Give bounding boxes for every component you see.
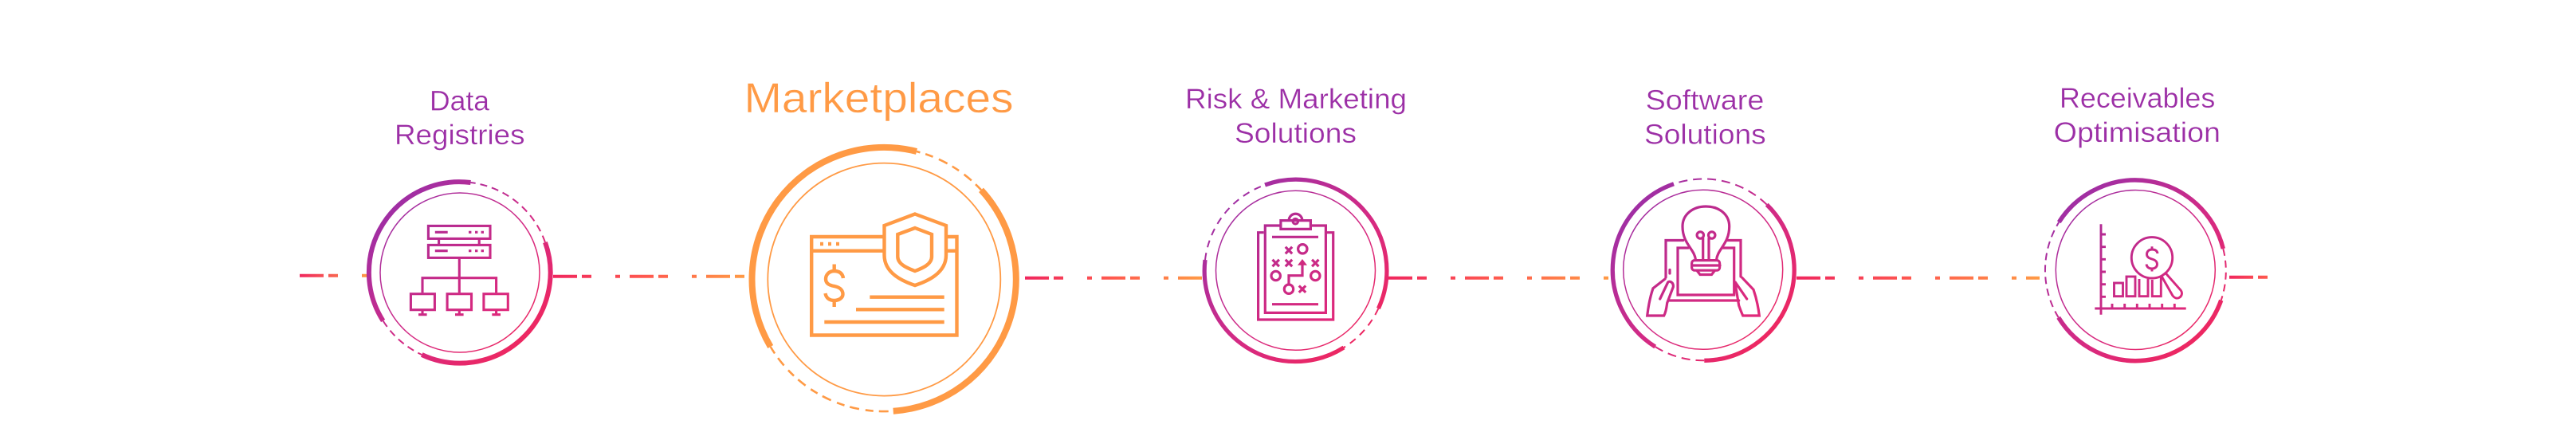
- heading: Risk and Marketing Solutions: [1185, 84, 1407, 149]
- connector: Data Registries to Marketplaces: [553, 275, 744, 278]
- heading: Receivables Optimisation: Optimisation: [2054, 117, 2221, 148]
- ring: Software Solutions: [1612, 179, 1794, 360]
- ring: Marketplaces: [752, 147, 1016, 411]
- panel: Data Registries: [369, 85, 551, 363]
- connector: Software to Receivables: [1797, 277, 2040, 280]
- ring: Receivables Optimisation: [2045, 180, 2226, 361]
- panel: Risk and Marketing Solutions: [1185, 84, 1407, 362]
- connector: lead-in to Data Registries: [300, 274, 367, 277]
- heading: Data Registries: [395, 85, 524, 151]
- heading: Software Solutions: Solutions: [1644, 119, 1766, 150]
- heading: Receivables Optimisation: Receivables: [2060, 83, 2215, 114]
- connector: Marketplaces to Risk and Marketing: [1025, 277, 1202, 280]
- heading: Risk and Marketing Solutions: Risk & Marketing: [1185, 84, 1407, 115]
- heading: Software Solutions: [1644, 84, 1766, 150]
- heading: Data Registries: Registries: [395, 120, 524, 151]
- icon: bar chart with magnifying glass and dollar: [2095, 224, 2186, 315]
- heading: Marketplaces: Marketplaces: [744, 75, 1014, 122]
- icon: server network: [410, 226, 508, 315]
- connector: Risk and Marketing to Software: [1388, 277, 1608, 280]
- connector: lead-out from Receivables: [2229, 276, 2268, 279]
- heading: Software Solutions: Software: [1646, 84, 1764, 116]
- panel: Receivables Optimisation: [2045, 83, 2226, 361]
- heading: Risk and Marketing Solutions: Solutions: [1235, 118, 1357, 149]
- panel: Software Solutions: [1612, 84, 1794, 360]
- ring: Risk and Marketing Solutions: [1204, 179, 1387, 362]
- icon: hands holding tablet with light bulb: [1647, 206, 1759, 316]
- icon: clipboard with play diagram: [1259, 214, 1333, 320]
- icon: browser window with shield and dollar: [811, 214, 956, 335]
- ring: Data Registries: [369, 182, 551, 363]
- panel: Marketplaces: [744, 75, 1016, 411]
- heading: Data Registries: Data: [430, 85, 490, 116]
- heading: Receivables Optimisation: [2054, 83, 2221, 148]
